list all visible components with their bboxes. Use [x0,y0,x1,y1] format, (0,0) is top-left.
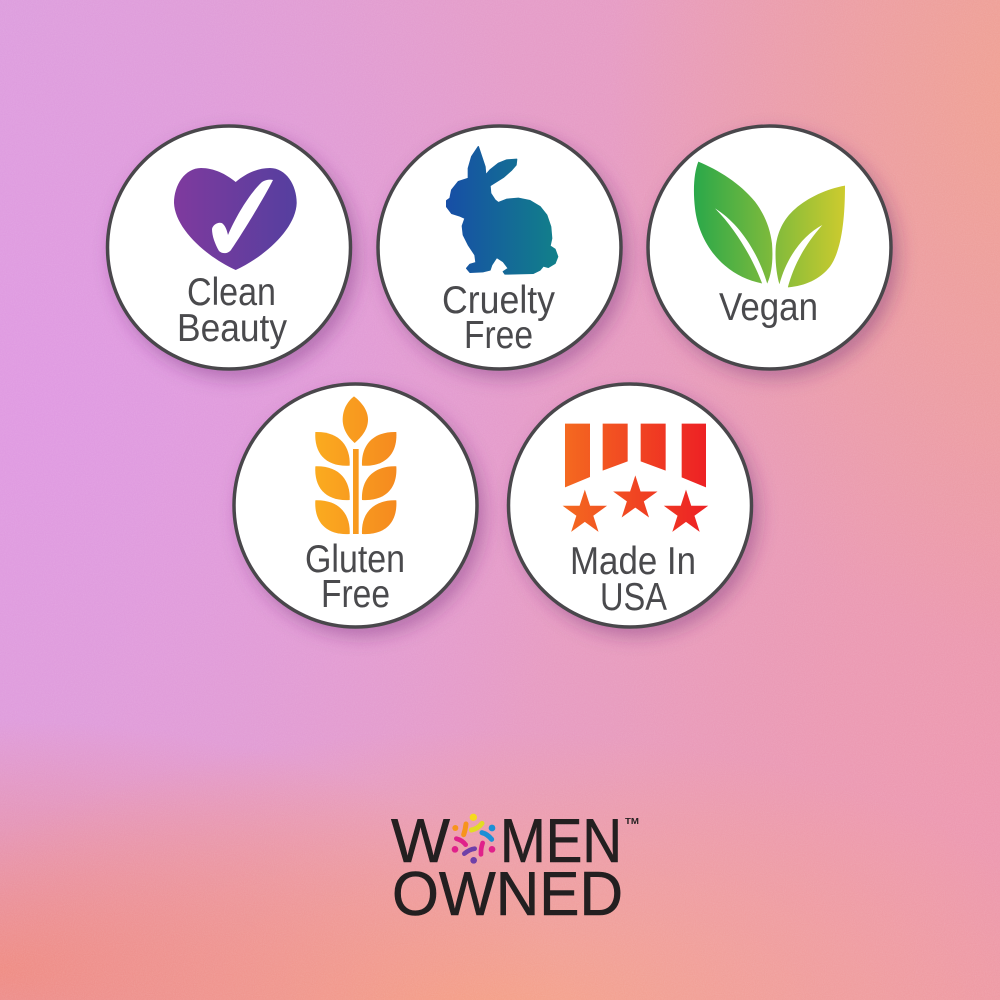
icon: heart with check [174,168,297,270]
label: Made In USA: USA [600,576,667,619]
logo: Women Owned [391,807,639,929]
label: Made In USA [570,540,696,619]
icon: two leaves [694,162,845,288]
logo: Women Owned: OWNED [392,860,623,929]
label: Vegan: Vegan [719,286,818,329]
label: Gluten Free [305,538,405,616]
label: Gluten Free: Free [321,573,390,616]
icon: rabbit [447,147,558,274]
label: Made In USA: Made In [570,540,696,583]
label: Clean Beauty: Beauty [177,307,287,350]
label: Clean Beauty: Clean [187,271,276,314]
label: Gluten Free: Gluten [305,538,405,581]
icon: banners and stars [563,424,708,532]
badge: Vegan [648,126,891,369]
icon: wheat [315,396,396,534]
label: Clean Beauty [177,271,287,350]
badge: Made In USA [508,384,752,627]
logo: Women Owned: W [391,807,450,876]
logo: Women Owned: MEN [500,807,622,876]
badge: Gluten Free [234,384,477,627]
badge: Cruelty Free [378,126,621,369]
label: Cruelty Free: Cruelty [442,279,555,322]
logo: Women Owned: TM [625,817,639,826]
label: Cruelty Free [442,279,555,357]
logo confetti mark [452,814,495,864]
label: Cruelty Free: Free [464,314,533,357]
badge: Clean Beauty [108,126,350,369]
